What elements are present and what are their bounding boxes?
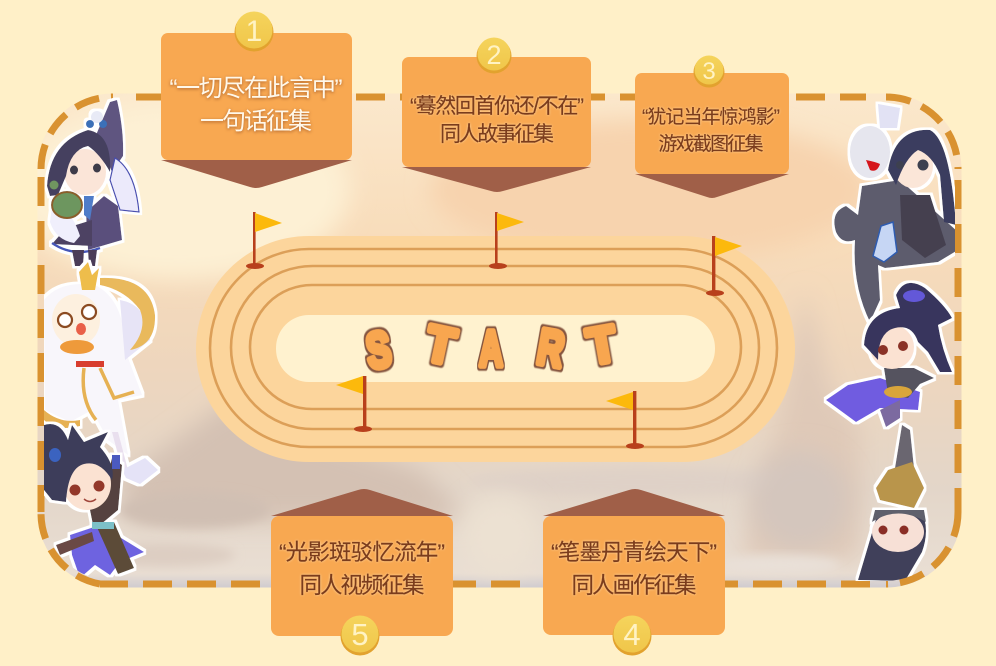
character: purple robed sage with turtle	[47, 100, 139, 266]
card text: “光影斑驳忆流年”	[279, 540, 445, 565]
START lettering: A	[479, 321, 503, 377]
character: upside down armoured warrior	[858, 425, 926, 581]
flag 5	[606, 391, 644, 449]
arrow	[161, 160, 352, 188]
card 5: fan videos	[271, 489, 453, 656]
START lettering: R	[533, 320, 568, 379]
number badge	[476, 38, 512, 74]
number badge: 2	[486, 40, 502, 70]
number badge: 4	[623, 617, 641, 652]
card body	[161, 33, 352, 160]
number badge	[612, 616, 652, 656]
card text: “蓦然回首你还/不在”	[410, 95, 584, 118]
number badge	[234, 12, 274, 52]
arrow	[635, 174, 789, 198]
number badge: 5	[351, 617, 369, 652]
character: white haired elder with gold ribbons	[44, 262, 158, 484]
flag 3	[706, 236, 742, 296]
dashed frame	[41, 97, 958, 584]
characters right column	[826, 104, 958, 581]
arrow	[271, 489, 453, 516]
card 2: fan stories	[402, 38, 591, 192]
infield	[276, 315, 715, 382]
card text: “犹记当年惊鸿影”	[642, 106, 780, 128]
card 1: one sentence	[161, 12, 352, 188]
card 4: fan art	[543, 489, 725, 656]
running track	[196, 236, 795, 462]
START lettering: T	[583, 316, 621, 376]
character: purple ponytail girl with feathers	[826, 283, 952, 427]
arrow	[543, 489, 725, 516]
card 2: fan stories: 同人故事征集	[440, 123, 554, 146]
card 5: fan videos: 同人视频征集	[300, 573, 424, 598]
flag 1	[246, 212, 282, 269]
number badge	[340, 616, 380, 656]
flag 2	[489, 212, 524, 269]
card text: “笔墨丹青绘天下”	[551, 540, 717, 565]
flag 4	[336, 376, 372, 432]
lane lines	[210, 249, 777, 447]
card text: “一切尽在此言中”	[170, 75, 342, 102]
track base	[196, 236, 795, 462]
number badge: 1	[246, 15, 262, 48]
card 1: one sentence: 一句话征集	[200, 108, 312, 135]
character: dark haired youth in purple skirt	[44, 424, 144, 578]
START lettering: S	[363, 322, 394, 380]
number badge	[694, 56, 724, 88]
card body	[271, 516, 453, 636]
number badge: 3	[702, 58, 716, 85]
arrow	[402, 167, 591, 192]
card body	[543, 516, 725, 635]
card 3: game screenshots: 游戏截图征集	[658, 133, 764, 155]
card body	[635, 73, 789, 174]
card body	[402, 57, 591, 167]
card 3: game screenshots	[635, 56, 789, 198]
character: dark haired girl with masked ghost	[834, 104, 958, 322]
START lettering: T	[421, 315, 460, 376]
START lettering	[363, 315, 621, 380]
characters left column	[44, 100, 158, 578]
background painting inside frame	[10, 93, 962, 588]
card 4: fan art: 同人画作征集	[572, 573, 696, 598]
